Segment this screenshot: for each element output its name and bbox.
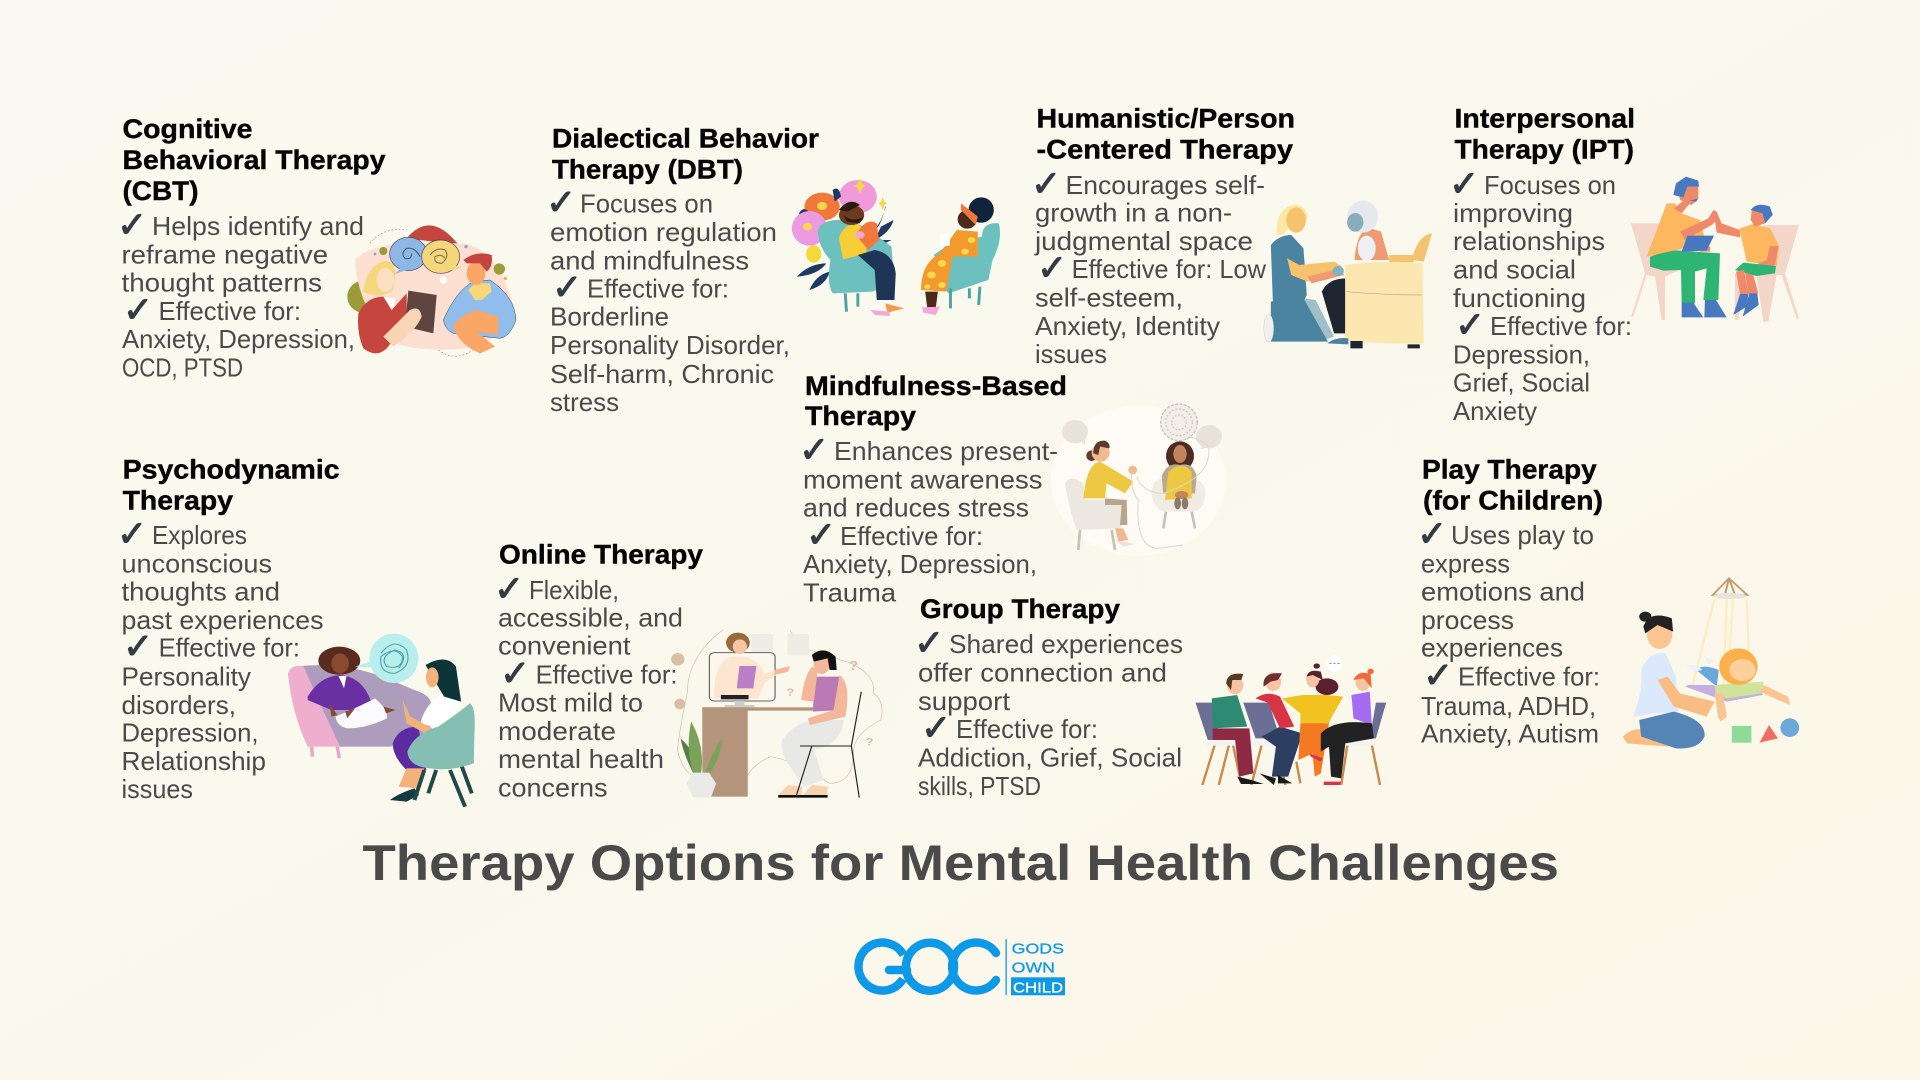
panel: Play Therapy for Children [1417, 454, 1799, 749]
text block: CBT description: ✓ [117, 205, 147, 246]
text block: Mindfulness description: Enhances present- [834, 436, 1058, 466]
heading: CBT: Cognitive [122, 114, 252, 144]
heading: Psychodynamic: Psychodynamic [123, 454, 340, 484]
text block: Humanistic description: Anxiety, Identity [1035, 311, 1220, 341]
text block: DBT description: emotion regulation [550, 217, 777, 247]
text block: Play description: emotions and [1421, 577, 1585, 607]
text block: Play description: Trauma, ADHD, [1421, 691, 1596, 721]
text block: IPT description: improving [1453, 198, 1573, 228]
text block: CBT description: OCD, PTSD [122, 353, 243, 383]
panel: Psychodynamic Therapy [117, 454, 475, 807]
text block: Mindfulness description [799, 430, 1058, 608]
text block: IPT description [1449, 164, 1632, 426]
text block: Psychodynamic description: Relationship [122, 746, 266, 776]
text block: Psychodynamic description: thoughts and [122, 577, 280, 607]
text block: IPT description: Anxiety [1453, 396, 1537, 426]
text block: Online description: accessible, and [498, 603, 683, 633]
text block: IPT description: Grief, Social [1453, 368, 1590, 398]
text block: CBT description: reframe negative [122, 239, 328, 269]
text block: Online description: Most mild to [498, 688, 643, 718]
text block: DBT description: Personality Disorder, [550, 330, 790, 360]
text block: IPT description: ✓ [1449, 164, 1479, 205]
illustration: video call between counselor and client at desk: ? [865, 735, 873, 748]
text block: Mindfulness description: moment awareness [803, 464, 1042, 494]
text block: Online description: convenient [498, 630, 631, 660]
text block: IPT description: and social [1453, 255, 1576, 285]
panel: Group Therapy [914, 594, 1386, 801]
text block: Group description: support [918, 686, 1011, 716]
heading: Psychodynamic [123, 454, 340, 515]
text block: IPT description: relationships [1453, 226, 1605, 256]
text block: Psychodynamic description: past experiences [122, 605, 324, 635]
text block: CBT description: Helps identify and [152, 211, 364, 241]
heading: Play Therapy: Play Therapy [1422, 454, 1597, 484]
heading: Psychodynamic: Therapy [123, 485, 233, 515]
heading: Humanistic: Humanistic/Person [1036, 104, 1295, 134]
illustration: nurse kneeling beside older person in armchair [1264, 201, 1432, 348]
heading: DBT [552, 124, 820, 184]
text block: Humanistic description [1031, 164, 1266, 369]
heading: Play Therapy [1422, 454, 1603, 515]
text block: IPT description: ✓ [1455, 305, 1485, 346]
text block: Play description: experiences [1421, 633, 1563, 663]
text block: DBT description: and mindfulness [550, 245, 749, 275]
text block: Online description: moderate [498, 716, 616, 746]
text block: Mindfulness description: Effective for: [840, 521, 983, 551]
text block: DBT description: ✓ [546, 183, 576, 224]
text block: CBT description: Effective for: [158, 296, 301, 326]
text block: Mindfulness description: Trauma [803, 578, 897, 608]
text block: Humanistic description: Encourages self- [1066, 170, 1265, 200]
illustration: video call between counselor and client at desk [671, 630, 882, 798]
heading: IPT: Interpersonal [1454, 104, 1635, 134]
logo: GOC Gods Own Child: GODS [1012, 940, 1064, 957]
text block: Psychodynamic description: ✓ [123, 627, 153, 668]
text block: Psychodynamic description: Personality [122, 662, 251, 692]
text block: DBT description: Self-harm, Chronic [550, 359, 774, 389]
text block: Play description [1417, 514, 1600, 748]
illustration: counselor untangling thread with seated client [1051, 404, 1226, 556]
text block: Group description: Shared experiences [949, 629, 1183, 659]
text block: DBT description: Borderline [550, 302, 669, 332]
text block: Psychodynamic description: unconscious [122, 549, 272, 579]
heading: Mindfulness [805, 371, 1067, 431]
illustration: adult and child high five on chairs [1631, 177, 1799, 322]
text block: Group description: ✓ [921, 708, 951, 749]
text block: Humanistic description: ✓ [1031, 164, 1061, 205]
text block: Humanistic description: judgmental space [1034, 226, 1253, 256]
title: Therapy Options for Mental Health Challenges [362, 835, 1559, 891]
heading: IPT: Therapy (IPT) [1454, 134, 1634, 164]
text block: Mindfulness description: ✓ [799, 430, 829, 471]
text block: Play description: express [1421, 549, 1510, 579]
text block: DBT description: Effective for: [587, 274, 729, 304]
heading: CBT: (CBT) [122, 176, 198, 206]
text block: Play description: Effective for: [1458, 662, 1600, 692]
illustration: therapist with clipboard and client [347, 225, 516, 356]
panel: Humanistic/Person-Centered Therapy [1031, 104, 1432, 369]
illustration: video call between counselor and client at desk: ? [849, 659, 858, 674]
text block: Online description: Flexible, [529, 575, 619, 605]
text block: Online description: concerns [498, 773, 608, 803]
logo: GOC Gods Own Child [858, 939, 1065, 997]
text block: Psychodynamic description: disorders, [122, 690, 236, 720]
text block: CBT description [117, 205, 364, 383]
text block: DBT description: Focuses on [580, 189, 713, 219]
text block: Play description: Anxiety, Autism [1421, 718, 1599, 748]
illustration: client on pink sofa with therapist in teal chair [288, 634, 475, 807]
text block: DBT description: stress [550, 387, 619, 417]
heading: Mindfulness: Therapy [805, 401, 916, 431]
heading: Group: Group Therapy [920, 594, 1120, 624]
text block: Group description: ✓ [914, 623, 944, 664]
heading: CBT: Behavioral Therapy [122, 145, 386, 175]
logo: GOC Gods Own Child: OWN [1012, 959, 1055, 976]
text block: Online description: ✓ [494, 569, 524, 610]
text block: Play description: ✓ [1417, 514, 1447, 555]
logo: GOC Gods Own Child: CHILD [1013, 980, 1063, 997]
text block: Online description [494, 569, 683, 803]
text block: Group description: Effective for: [956, 714, 1098, 744]
heading: IPT [1454, 104, 1635, 164]
text block: IPT description: Effective for: [1490, 311, 1632, 341]
panel: Mindfulness-Based Therapy [799, 371, 1226, 608]
panel: Online Therapy [494, 539, 882, 803]
text block: Play description: process [1421, 605, 1514, 635]
text block: Online description: ✓ [500, 653, 530, 694]
text block: Humanistic description: growth in a non- [1035, 198, 1232, 228]
text block: Psychodynamic description: Effective for: [159, 633, 300, 663]
text block: CBT description: thought patterns [122, 268, 322, 298]
illustration: therapist with child on swing and toy blocks [1623, 578, 1799, 749]
illustration: video call between counselor and client at desk: ? [786, 686, 794, 699]
illustration: two people in teal armchairs with flowers [792, 178, 1000, 316]
heading: Mindfulness: Mindfulness-Based [805, 371, 1067, 401]
text block: Mindfulness description: Anxiety, Depression, [803, 549, 1037, 579]
text block: CBT description: ✓ [123, 290, 153, 331]
text block: Group description: offer connection and [918, 658, 1167, 688]
illustration: four people talking in a circle of chairs [1196, 655, 1386, 785]
text block: Psychodynamic description: issues [122, 774, 193, 804]
text block: IPT description: Focuses on [1484, 170, 1616, 200]
panel: Dialectical Behavior Therapy [546, 124, 1000, 417]
heading: DBT: Therapy (DBT) [552, 154, 743, 184]
text block: Humanistic description: self-esteem, [1035, 283, 1183, 313]
heading: DBT: Dialectical Behavior [552, 124, 820, 154]
text block: Humanistic description: ✓ [1037, 248, 1067, 289]
text block: Psychodynamic description [117, 514, 324, 804]
text block: Psychodynamic description: Depression, [122, 718, 258, 748]
text block: Play description: ✓ [1423, 656, 1453, 697]
text block: CBT description: Anxiety, Depression, [122, 324, 355, 354]
panel: Cognitive Behavioral Therapy [117, 114, 516, 383]
text block: DBT description [546, 183, 790, 417]
heading: Humanistic [1036, 104, 1295, 164]
heading: Humanistic: -Centered Therapy [1036, 134, 1293, 164]
text block: Psychodynamic description: Explores [152, 520, 247, 550]
text block: Psychodynamic description: ✓ [117, 514, 147, 555]
text block: Online description: mental health [498, 744, 664, 774]
text block: Group description [914, 623, 1183, 801]
text block: Group description: skills, PTSD [918, 771, 1041, 801]
text block: Mindfulness description: and reduces stress [803, 493, 1029, 523]
heading: CBT [122, 114, 386, 206]
text block: IPT description: functioning [1453, 283, 1586, 313]
text block: Online description: Effective for: [536, 659, 678, 689]
text block: IPT description: Depression, [1453, 339, 1590, 369]
text block: Group description: Addiction, Grief, Social [918, 743, 1182, 773]
text block: Mindfulness description: ✓ [806, 515, 836, 556]
heading: Play Therapy: (for Children) [1423, 485, 1603, 515]
text block: Humanistic description: Effective for: Low [1072, 254, 1266, 284]
text block: Play description: Uses play to [1451, 520, 1594, 550]
panel: Interpersonal Therapy [1449, 104, 1799, 426]
text block: Humanistic description: issues [1035, 339, 1107, 369]
heading: Online: Online Therapy [499, 539, 703, 569]
text block: DBT description: ✓ [552, 268, 582, 309]
